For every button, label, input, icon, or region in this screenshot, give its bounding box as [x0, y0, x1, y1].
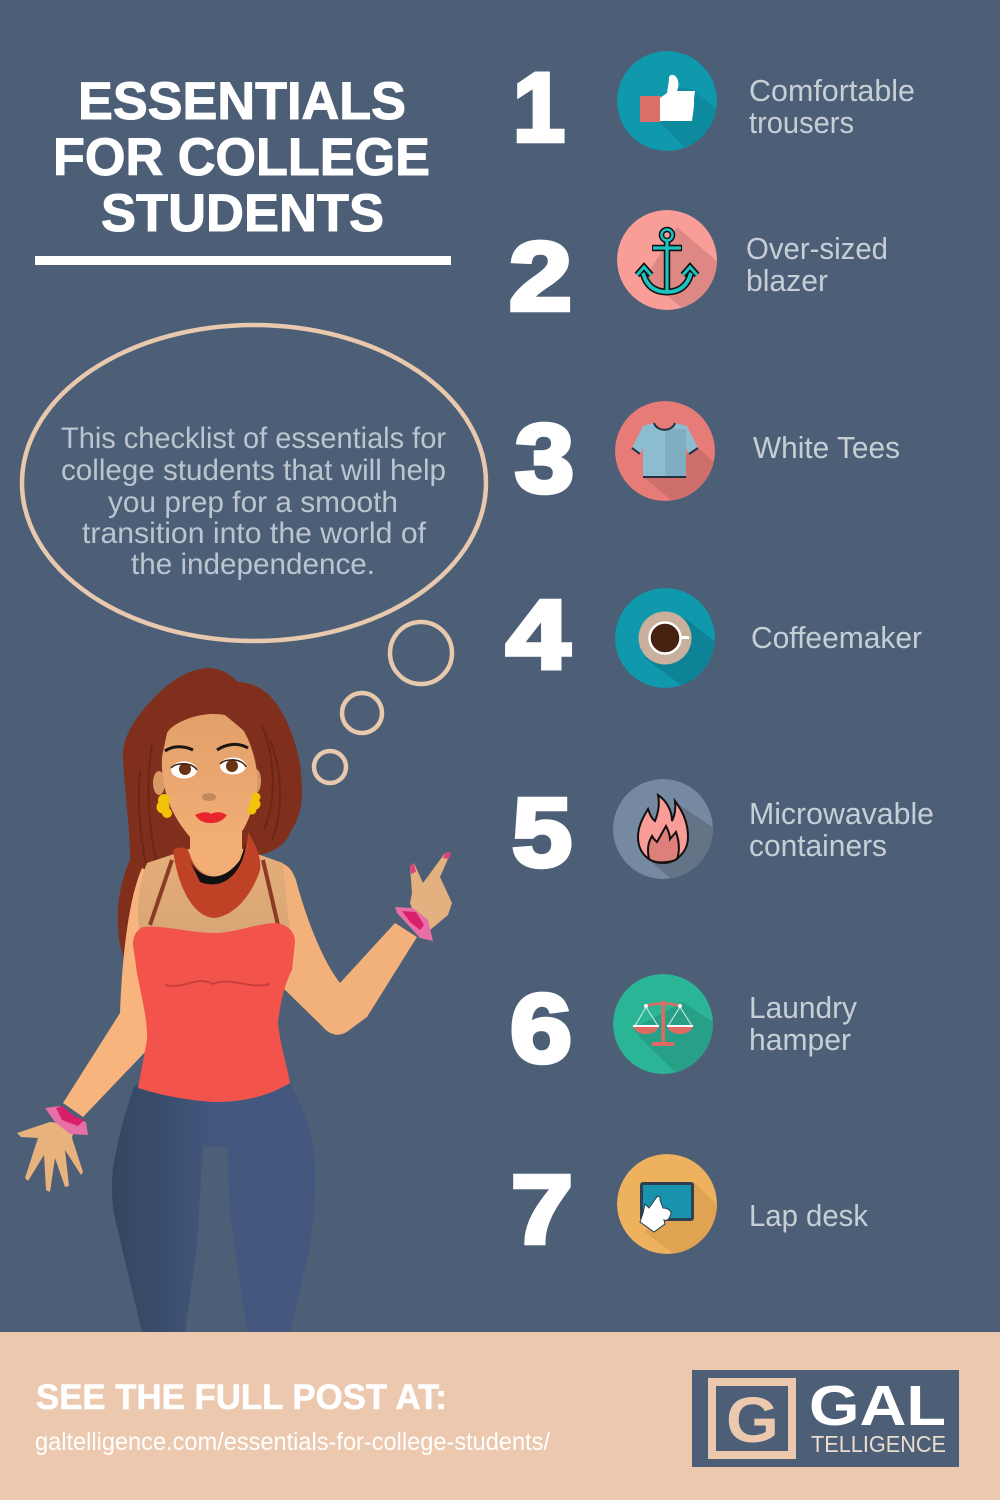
thought bubble: you prep for a smooth	[108, 486, 398, 519]
item 6	[510, 974, 857, 1084]
icon: coffee cup	[615, 588, 715, 688]
thought bubble: the independence.	[131, 548, 375, 581]
thought bubble: transition into the world of	[82, 517, 427, 550]
title	[53, 72, 430, 243]
earrings	[156, 792, 260, 818]
pants	[112, 1083, 315, 1332]
number 7: 7	[511, 1155, 573, 1264]
ears	[153, 771, 165, 795]
footer url: galtelligence.com/essentials-for-college-students/	[35, 1428, 550, 1456]
right hand	[410, 852, 452, 930]
footer heading: SEE THE FULL POST AT:	[36, 1378, 447, 1417]
item 6: hamper	[749, 1022, 851, 1057]
title: FOR COLLEGE	[53, 128, 430, 187]
scarf	[173, 832, 260, 918]
label: White Tees	[753, 430, 900, 465]
icon: scales	[613, 974, 713, 1074]
label: Comfortable	[749, 73, 915, 108]
label: Over-sized	[746, 231, 888, 266]
label: Lap desk	[749, 1198, 868, 1233]
logo: TELLIGENCE	[811, 1431, 946, 1457]
nose and lips	[202, 793, 216, 801]
footer band	[0, 1332, 1000, 1500]
item 3	[514, 401, 899, 501]
right arm	[272, 862, 417, 1035]
label: Microwavable	[749, 796, 934, 831]
thought bubble: This checklist of essentials for	[61, 422, 446, 455]
number 3: 3	[515, 404, 574, 513]
item 1	[516, 51, 914, 151]
item 4	[505, 588, 922, 688]
face	[162, 714, 257, 846]
number 6: 6	[510, 974, 572, 1083]
straps	[150, 860, 278, 925]
left scrunchie	[45, 1106, 88, 1135]
logo	[692, 1370, 959, 1467]
icon: flame	[613, 779, 713, 879]
left hand	[17, 1122, 83, 1192]
label: Laundry	[749, 990, 857, 1025]
eyes	[171, 762, 197, 778]
icon: t-shirt	[615, 401, 715, 501]
title: ESSENTIALS	[78, 72, 406, 131]
number 2: 2	[509, 222, 572, 331]
item 2: blazer	[746, 263, 828, 298]
item 5: containers	[749, 828, 887, 863]
item 1: trousers	[749, 105, 854, 140]
label: Coffeemaker	[751, 620, 922, 655]
logo: GAL	[809, 1374, 946, 1438]
hair back	[118, 668, 302, 968]
right scrunchie	[395, 907, 433, 941]
illustration: woman	[17, 668, 452, 1332]
left arm	[63, 868, 165, 1117]
number 5: 5	[512, 778, 572, 887]
icon: anchor	[617, 210, 717, 310]
top	[133, 923, 295, 1102]
logo: G	[726, 1384, 779, 1456]
thought bubble	[22, 325, 486, 783]
number 4: 4	[506, 580, 570, 689]
item 7	[511, 1154, 868, 1264]
title: STUDENTS	[101, 184, 384, 243]
icon: thumbs up	[617, 51, 717, 151]
chest and neck	[138, 828, 290, 935]
item 5	[512, 779, 933, 879]
icon: tablet	[617, 1154, 717, 1254]
number 1: 1	[513, 53, 565, 162]
item 2	[510, 210, 886, 312]
thought bubble: college students that will help	[61, 454, 446, 487]
